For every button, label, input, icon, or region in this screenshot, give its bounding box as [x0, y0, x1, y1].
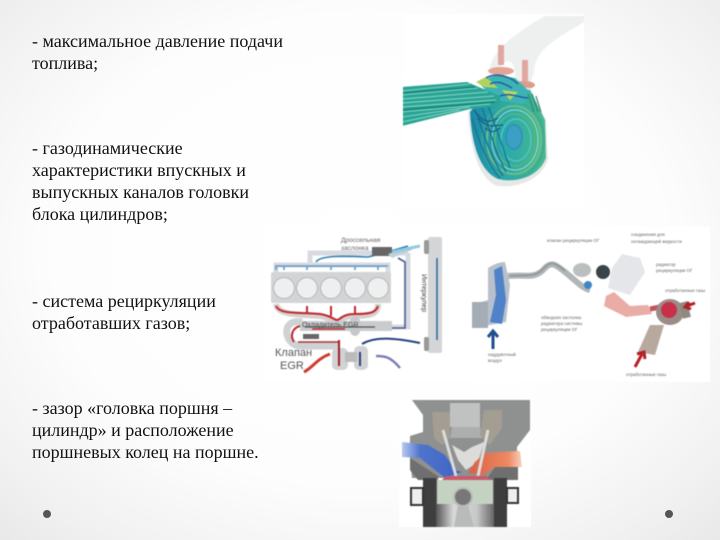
text: gas dynamics: характеристики впускных и [32, 160, 246, 180]
intake manifold [276, 246, 408, 328]
text: exhaust gas recirculation: - система рециркуляции [32, 291, 216, 311]
labels: отработанные газы [626, 372, 666, 377]
labels: наддувочный [488, 351, 516, 357]
labels: воздух [488, 358, 503, 363]
labels: клапан рециркуляции ОГ [547, 238, 600, 243]
labels: рециркуляции ОГ [541, 327, 578, 332]
text: fuel pressure [32, 31, 283, 73]
EGR radiator red section [604, 292, 660, 317]
turbine [638, 299, 691, 355]
air intake [472, 262, 510, 328]
labels: охлаждающей жидкости [631, 238, 682, 244]
throttle label: Дроссельная [341, 237, 381, 244]
intake ports [488, 16, 584, 89]
labels: соединения для [631, 232, 665, 237]
intercooler: Интеркулер [420, 274, 427, 312]
EGR cooler: Охладитель EGR [302, 322, 358, 329]
arrow: blue air [488, 331, 498, 349]
pipe [508, 264, 590, 290]
exhaust port [468, 451, 522, 475]
image: airflow simulation in cylinder [402, 16, 584, 186]
image: EGR schematic [270, 236, 442, 374]
piston [436, 480, 494, 527]
EGR label: Клапан [275, 347, 312, 359]
arrow: red exhaust right [685, 302, 695, 309]
labels: обводная заслонка [541, 315, 582, 320]
image: EGR schematic: заслонка [341, 245, 369, 252]
labels: отработанные газы [665, 288, 705, 293]
EGR cooler [287, 316, 392, 346]
head casing [410, 400, 530, 480]
throttle [372, 246, 420, 258]
text: piston crown gap: - зазор «головка поршня – [32, 398, 232, 418]
image: EGR schematic: EGR [280, 360, 304, 372]
intake port [402, 442, 462, 478]
intake pipe [402, 82, 500, 126]
text: piston crown gap [32, 398, 259, 462]
decorative dot: left [43, 510, 51, 518]
cylinder [468, 75, 548, 186]
text: gas dynamics: блока цилиндров; [32, 204, 168, 224]
labels: радиатор [656, 262, 676, 267]
text: fuel pressure: - максимальное давление подачи [32, 31, 283, 51]
text: piston crown gap: поршневых колец на поршне. [32, 442, 259, 462]
text: gas dynamics: - газодинамические [32, 138, 183, 158]
text: gas dynamics: выпускных каналов головки [32, 182, 249, 202]
combustion chamber [442, 476, 492, 480]
image: EGR assembly photo [472, 232, 710, 382]
exhaust manifold [276, 304, 378, 322]
labels [488, 232, 705, 377]
text: exhaust gas recirculation: отработавших газов; [32, 313, 190, 333]
arrow: red exhaust lower [635, 352, 645, 367]
cylinder block [411, 478, 518, 527]
text: exhaust gas recirculation [32, 291, 216, 333]
text: gas dynamics [32, 138, 249, 224]
engine block [271, 272, 391, 303]
text: piston crown gap: цилиндр» и расположение [32, 420, 234, 440]
labels: радиатора системы [541, 321, 582, 326]
decorative dot: right [665, 510, 673, 518]
labels: рециркуляции ОГ [656, 268, 693, 273]
intercooler [420, 237, 442, 353]
valves [443, 430, 488, 476]
image: cylinder head cross-section [402, 399, 530, 528]
EGR valve [573, 254, 645, 295]
turbocharger [304, 339, 420, 372]
text: fuel pressure: топлива; [32, 53, 98, 73]
